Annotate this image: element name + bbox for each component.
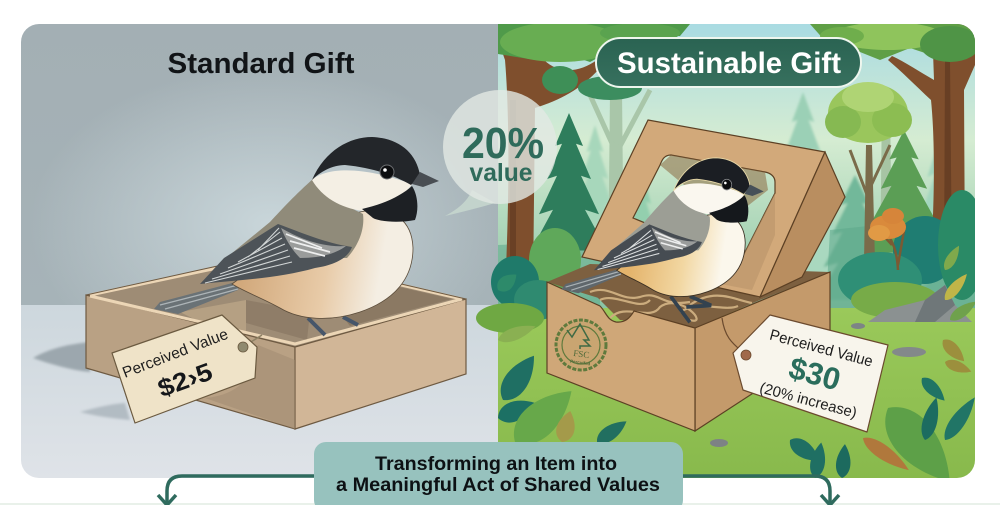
right box: sustainable gift [547, 272, 830, 431]
FSC seal: FSC [573, 348, 590, 360]
packing nest [585, 285, 760, 328]
banner: transforming an item [314, 442, 683, 505]
box left face [547, 282, 695, 431]
bird bib [709, 195, 748, 223]
left box: standard gift [86, 262, 466, 429]
bird beak [745, 185, 764, 196]
tag body [733, 315, 888, 432]
bird bib [362, 186, 417, 222]
tree trunks [503, 24, 975, 261]
tag label: Perceived Value [120, 326, 231, 382]
bird beak [412, 172, 439, 187]
bird back [612, 189, 710, 250]
price tag: standard gift [112, 315, 262, 423]
bird cap [312, 137, 420, 185]
rocks [710, 285, 972, 447]
tag increase note: (20% increase) [758, 380, 859, 422]
right box lid: sustainable gift [582, 120, 845, 297]
foreground leaves [493, 243, 981, 495]
price tag: sustainable gift [722, 315, 888, 432]
right box interior [547, 264, 830, 328]
bird cheek [674, 183, 745, 214]
arrow: right branch [678, 476, 839, 505]
bird body [232, 210, 413, 318]
bird wing [200, 224, 352, 284]
tag price: $2›5 [154, 358, 216, 403]
ground [498, 308, 975, 480]
bird: sustainable gift chickadee [561, 158, 764, 322]
tag body [112, 315, 257, 423]
bird cheek [312, 170, 412, 211]
callout: 20% value bubble: value [470, 159, 533, 187]
bottom strip [0, 503, 1000, 505]
bird back [226, 178, 363, 258]
tree with light foliage [825, 82, 912, 262]
bird eye [380, 165, 394, 179]
panel: sustainable gift forest background [476, 22, 988, 495]
bird eye [722, 179, 732, 190]
tag string [243, 335, 262, 347]
conifer left [531, 113, 944, 252]
tag hole [238, 342, 248, 352]
tag price: $30 [785, 350, 844, 397]
bird tail [154, 281, 240, 314]
tag string [722, 318, 746, 355]
heading: sustainable gift: Sustainable Gift [617, 47, 841, 80]
arrow: left branch [158, 476, 320, 505]
bird legs [308, 317, 358, 335]
panel: standard gift background [21, 24, 510, 478]
bird: standard gift chickadee [154, 137, 439, 335]
tag label: Perceived Value [768, 327, 875, 371]
FSC seal: Percvifed [570, 359, 591, 366]
heading: sustainable gift [596, 38, 861, 87]
bushes and shrubs [476, 190, 986, 333]
bird wing [594, 224, 702, 270]
bird legs [671, 296, 711, 322]
canopy [498, 22, 980, 100]
banner: transforming an item: Transforming an Item into [375, 453, 617, 475]
heading: standard gift: Standard Gift [168, 48, 355, 80]
tag hole [741, 350, 751, 360]
bird body [617, 214, 745, 297]
bird cap [674, 158, 750, 195]
FSC seal [556, 320, 606, 370]
callout: 20% value bubble [443, 90, 557, 216]
bird tail [561, 268, 622, 293]
callout: 20% value bubble: 20% [462, 119, 544, 168]
banner: transforming an item: a Meaningful Act of Shared Values [336, 474, 660, 496]
box right face [695, 272, 830, 431]
